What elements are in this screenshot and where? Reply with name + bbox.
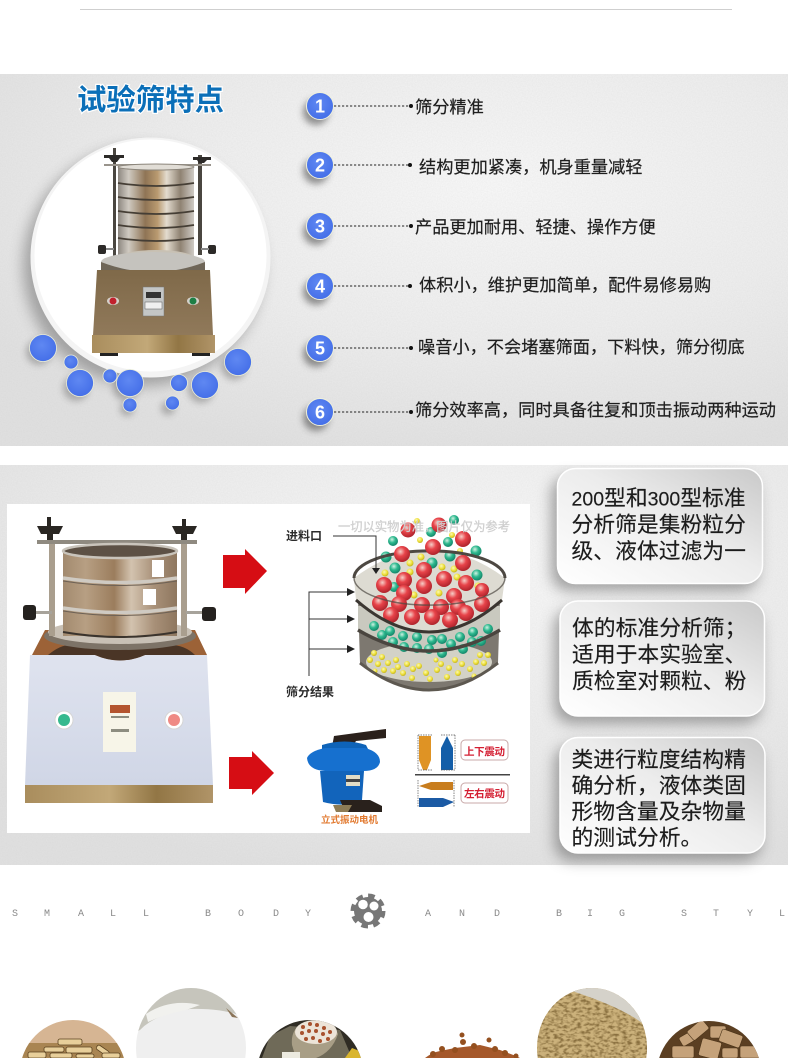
sample: sacks of beans: [259, 1020, 361, 1058]
slogan: small body and big style: I: [587, 909, 593, 920]
product photo circle: [23, 138, 270, 386]
slogan: small body and big style: A: [425, 909, 431, 920]
card: description 3: 类进行粒度结构精: [572, 747, 746, 772]
watermark: 一切以实物为准，图片仅为参考: [338, 519, 510, 534]
feature 1: 筛分精准: [415, 97, 484, 117]
feature 5: [303, 334, 745, 367]
panel: structure and description: [0, 465, 788, 865]
label: feed inlet: 进料口: [286, 528, 322, 543]
slogan: small body and big style: L: [110, 909, 116, 920]
slogan: small body and big style: L: [143, 909, 149, 920]
feature 5: 5: [315, 338, 325, 358]
card: description 2: 体的标准分析筛；: [572, 616, 746, 640]
slogan: small body and big style: O: [238, 909, 244, 920]
slogan: small body and big style: B: [205, 909, 211, 920]
slogan: small body and big style: D: [494, 909, 500, 920]
card: description 3: 确分析，液体类固: [572, 773, 746, 798]
feature 3: 产品更加耐用、轻捷、操作方便: [415, 217, 656, 237]
icon: gear with balls: [353, 896, 383, 926]
arrow: to vibration motor: [229, 751, 274, 795]
illustration: vibration motor: [307, 729, 386, 826]
upper green and yellow particles: [380, 515, 482, 598]
red particles: [372, 518, 490, 628]
badge: left-right vibration: 左右震动: [464, 787, 505, 800]
sample: wood pellets: [22, 1020, 124, 1058]
feature 3: [303, 212, 656, 245]
card: description 1: 级、液体过滤为一: [572, 538, 746, 564]
feature 5: 噪音小，不会堵塞筛面，下料快，筛分彻底: [418, 337, 745, 357]
slogan: small body and big style: N: [459, 909, 465, 920]
sieve top rim: [354, 551, 505, 578]
slogan: small body and big style: D: [273, 909, 279, 920]
feature 2: 2: [315, 156, 325, 176]
slogan: small body and big style: M: [44, 909, 50, 920]
feature 6: [303, 398, 776, 431]
slogan: small body and big style: S: [681, 909, 687, 920]
sample: tan grain: [537, 985, 649, 1058]
feature 4: 体积小，维护更加简单，配件易修易购: [419, 275, 711, 295]
label: sieving result: [286, 588, 355, 699]
feature 1: [303, 92, 484, 125]
feature 4: 4: [315, 276, 325, 296]
arrow: to sieve layers: [223, 549, 267, 594]
feature 6: 6: [315, 402, 325, 422]
panel: test sieve features: [0, 74, 788, 446]
yellow particles: [367, 650, 491, 682]
card: description 3: 形物含量及杂物量: [572, 799, 746, 824]
slogan: small body and big style: B: [556, 909, 562, 920]
card: description 2: [554, 601, 764, 724]
slogan: small body and big style: T: [713, 909, 719, 920]
top divider: [80, 9, 732, 10]
feature 6: 筛分效率高，同时具备往复和顶击振动两种运动: [415, 400, 776, 420]
card: description 3: [554, 738, 765, 861]
feature 3: 3: [315, 216, 325, 236]
green particles: [369, 621, 493, 658]
diagram: three-layer sieve with particles: [354, 515, 505, 690]
slogan: small body and big style: Y: [747, 909, 753, 920]
slogan: small body and big style: Y: [305, 909, 311, 920]
label: feed inlet: [286, 528, 380, 574]
decorative blue dots: [26, 334, 252, 416]
card: description 2: 质检室对颗粒、粉: [572, 668, 747, 694]
white diagram board: [7, 504, 530, 833]
card: description 3: 的测试分析。: [572, 825, 702, 850]
slogan: small body and big style: L: [779, 909, 785, 920]
sample: brown granule pile: [425, 1032, 520, 1058]
sample: white powder: [136, 985, 246, 1058]
slogan: small body and big style: G: [619, 909, 625, 920]
feature 4: [303, 272, 711, 305]
card: description 1: [551, 468, 762, 591]
motor label: 立式振动电机: [321, 814, 379, 826]
illustration: sieve shaker: [92, 148, 216, 356]
illustration: large sieve shaker: [23, 517, 216, 803]
feature 2: [303, 152, 642, 184]
feature 2: 结构更加紧凑，机身重量减轻: [419, 157, 642, 177]
slogan: small body and big style: [12, 896, 785, 926]
slogan: small body and big style: S: [12, 909, 18, 920]
feature 1: 1: [315, 96, 325, 116]
card: description 1: 200型和300型标准: [572, 486, 746, 510]
card: description 1: 分析筛是集粉粒分: [572, 512, 746, 537]
badge: up-down vibration: 上下震动: [464, 745, 505, 758]
heading: features title: 试验筛特点: [77, 84, 224, 117]
label: sieving result: 筛分结果: [286, 684, 334, 699]
slogan: small body and big style: A: [78, 909, 84, 920]
card: description 2: 适用于本实验室、: [572, 642, 746, 667]
diagram: vibration directions: [415, 735, 510, 807]
sample: compressed pellets: [659, 1021, 759, 1058]
